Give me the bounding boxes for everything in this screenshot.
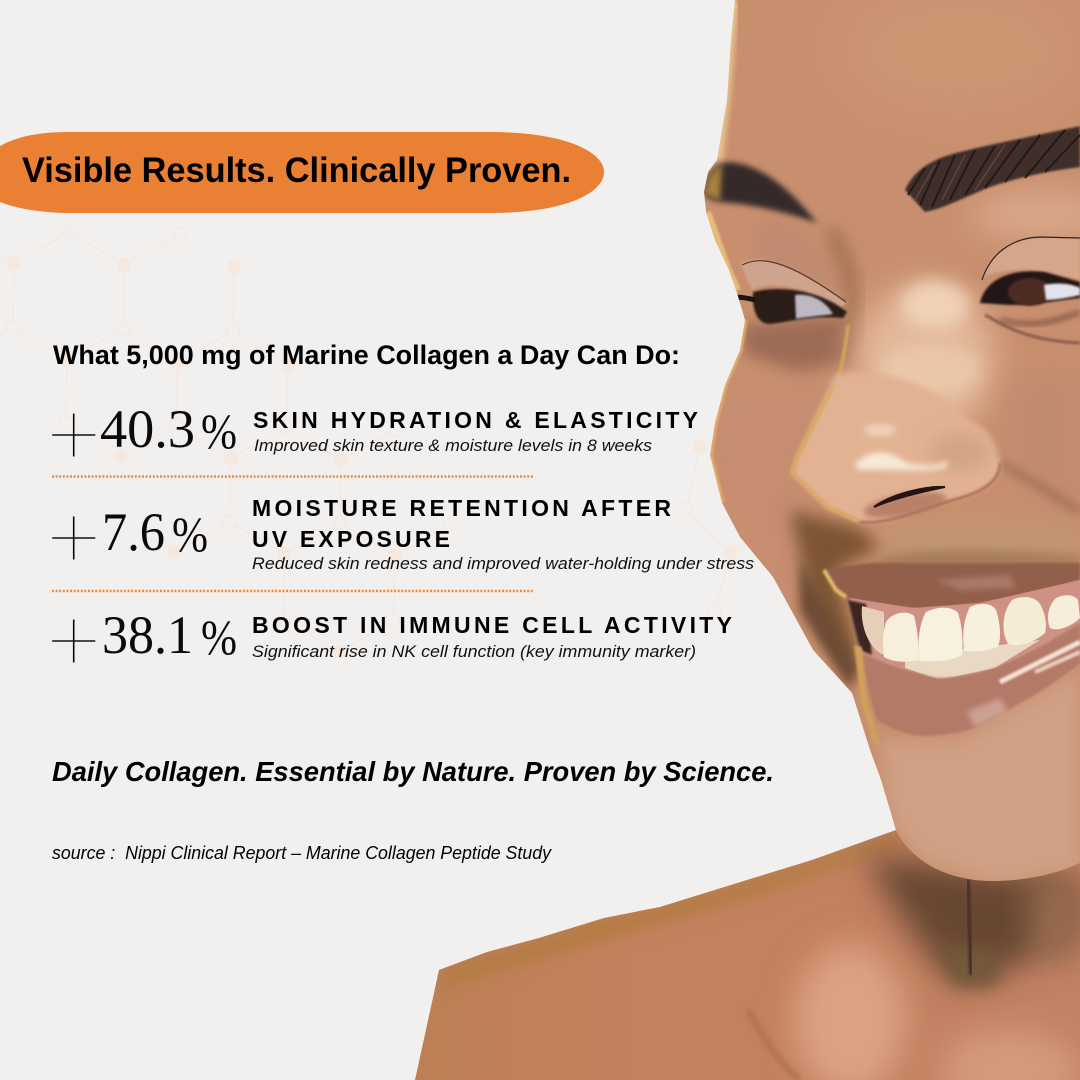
stat row: moisture retention (46, 482, 755, 593)
right eyebrow (905, 126, 1080, 212)
divider (52, 475, 534, 478)
headline pill (0, 132, 604, 213)
stat row: moisture retention: + (46, 482, 102, 593)
face (690, 0, 1080, 900)
teeth and gums (848, 580, 1080, 680)
nose bridge highlight (855, 285, 995, 435)
molecule pattern (0, 226, 750, 659)
right eye (980, 237, 1080, 343)
gold rim light (717, 0, 733, 160)
stat row: immune cell activity: 38.1 (102, 605, 193, 665)
shoulder and neck (400, 820, 1080, 1080)
stat row: skin hydration: % (201, 403, 237, 459)
stat row: immune cell activity: Significant rise in NK cell function (key immunity marker) (252, 642, 696, 661)
stat row: moisture retention: 7.6 (102, 502, 165, 562)
eye socket shadow (830, 230, 853, 360)
intro heading: What 5,000 mg of Marine Collagen a Day Can Do: (53, 340, 680, 370)
stat row: immune cell activity: % (201, 609, 237, 665)
philtrum and under-nose (870, 510, 1080, 565)
nose (792, 372, 1000, 523)
upper lip (823, 563, 1080, 609)
stat row: immune cell activity (46, 585, 732, 696)
stat row: moisture retention: MOISTURE RETENTION AFTER (252, 495, 671, 521)
chin (880, 670, 1080, 885)
stat row: moisture retention: Reduced skin redness and improved water-holding under stress (252, 554, 755, 573)
stat row: skin hydration (46, 379, 698, 490)
left eye (738, 259, 848, 326)
stat row: immune cell activity: + (46, 585, 102, 696)
left eyebrow (703, 162, 817, 223)
stat row: skin hydration: SKIN HYDRATION & ELASTICITY (253, 407, 698, 433)
tagline: Daily Collagen. Essential by Nature. Proven by Science. (52, 756, 774, 787)
lower lip (854, 623, 1080, 745)
right cheek (1035, 405, 1055, 464)
stat row: skin hydration: + (46, 379, 102, 490)
photo: smiling woman (400, 0, 1080, 1080)
divider (52, 590, 534, 592)
forehead tones (840, 0, 1080, 110)
headline text: Visible Results. Clinically Proven. (22, 151, 571, 190)
source note: source : Nippi Clinical Report – Marine Collagen Peptide Study (52, 843, 552, 863)
stat row: immune cell activity: BOOST IN IMMUNE CELL ACTIVITY (252, 612, 732, 638)
stat row: moisture retention: UV EXPOSURE (252, 526, 450, 552)
stat row: skin hydration: 40.3 (100, 399, 195, 459)
far cheek (710, 401, 814, 652)
stat row: moisture retention: % (172, 506, 208, 562)
stat row: skin hydration: Improved skin texture & moisture levels in 8 weeks (254, 436, 653, 455)
